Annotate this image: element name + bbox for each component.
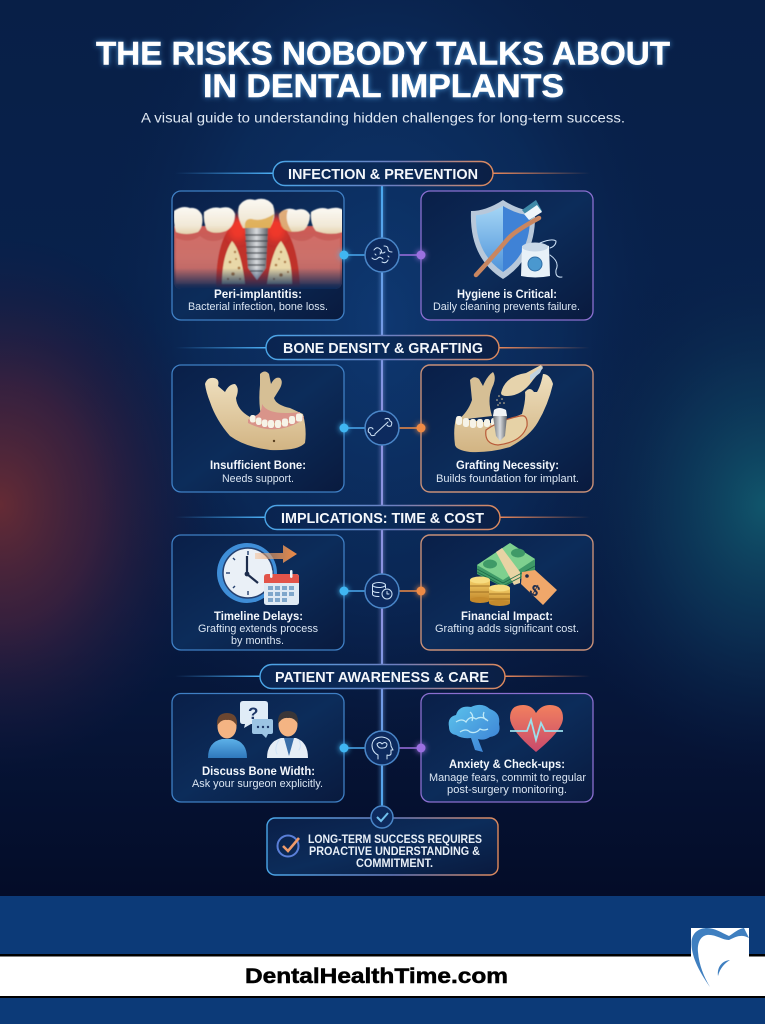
icon: heart with pulse — [510, 705, 563, 752]
card description: Needs support. — [222, 473, 294, 485]
card description: Builds foundation for implant. — [436, 473, 579, 485]
connector node: head — [340, 731, 426, 765]
panel: hygiene is critical — [421, 191, 593, 320]
heading pill: infection and prevention: INFECTION & PREVENTION — [288, 166, 478, 183]
card description — [429, 772, 586, 796]
card title: Financial Impact: — [461, 609, 553, 623]
illustration: jawbone — [205, 372, 306, 450]
connector node: bone — [340, 411, 426, 445]
icon: clock arrow and calendar — [217, 543, 299, 605]
title: IN DENTAL IMPLANTS — [203, 68, 564, 104]
icon: brain — [449, 705, 500, 752]
section rule left — [175, 172, 273, 174]
icon: patient and doctor conversation: ? — [248, 704, 258, 723]
connector node: check — [371, 806, 393, 828]
footer band — [0, 896, 765, 1024]
conclusion text: COMMITMENT. — [356, 856, 433, 870]
section rule left — [175, 347, 267, 348]
icon: shield with toothbrush and floss — [471, 200, 562, 279]
section rule right — [505, 676, 590, 677]
card title: Discuss Bone Width: — [202, 764, 315, 778]
icon: patient and doctor conversation — [208, 701, 308, 758]
subtitle: A visual guide to understanding hidden challenges for long-term success. — [141, 110, 625, 126]
section: bone density and grafting — [172, 336, 593, 492]
card description: Bacterial infection, bone loss. — [188, 301, 328, 313]
card title: Grafting Necessity: — [456, 458, 559, 472]
icon: check circle — [278, 836, 299, 856]
card description: by months. — [231, 635, 284, 647]
central timeline spine — [381, 185, 383, 820]
card description: Grafting extends process — [198, 623, 318, 635]
heading pill: bone density and grafting — [266, 336, 499, 360]
panel: anxiety and check-ups — [421, 694, 593, 802]
illustration: jawbone with graft and implant — [454, 365, 553, 452]
card title: Insufficient Bone: — [210, 458, 306, 472]
panel: conclusion — [267, 818, 498, 875]
card title: Hygiene is Critical: — [457, 287, 557, 301]
section: patient awareness and care — [172, 664, 593, 802]
card description: post-surgery monitoring. — [447, 784, 567, 796]
panel: peri-implantitis — [172, 191, 344, 320]
heading pill: bone density and grafting: BONE DENSITY & GRAFTING — [283, 340, 483, 357]
heading pill: implications: IMPLICATIONS: TIME & COST — [281, 510, 484, 527]
section rule left — [175, 516, 265, 518]
panel: insufficient bone — [172, 365, 344, 492]
icon: cash coins and price tag — [470, 543, 557, 606]
section rule right — [493, 172, 590, 174]
section rule right — [500, 516, 590, 518]
heading pill: patient awareness — [260, 664, 505, 688]
logo: tooth — [691, 928, 749, 987]
panel: grafting necessity — [421, 365, 593, 492]
section: infection and prevention — [172, 162, 593, 320]
conclusion text: LONG-TERM SUCCESS REQUIRES — [308, 832, 482, 846]
heading pill: infection and prevention — [273, 162, 493, 186]
illustration: inflamed gum with implant — [174, 199, 343, 289]
card title: Timeline Delays: — [214, 609, 303, 623]
card description: Ask your surgeon explicitly. — [192, 778, 323, 790]
conclusion text — [308, 832, 482, 870]
card title: Anxiety & Check-ups: — [449, 757, 565, 771]
connector node: time and cost — [340, 574, 426, 608]
panel: financial impact — [421, 535, 593, 650]
title — [96, 36, 670, 104]
connector node: bacteria — [340, 238, 426, 272]
section: implications time and cost — [172, 506, 593, 650]
card description: Manage fears, commit to regular — [429, 772, 586, 784]
section rule left — [175, 676, 260, 677]
panel: timeline delays — [172, 535, 344, 650]
card description: Daily cleaning prevents failure. — [433, 301, 580, 313]
heading pill: patient awareness: PATIENT AWARENESS & CARE — [275, 669, 489, 686]
heading pill: implications — [265, 506, 500, 530]
card title: Peri-implantitis: — [214, 287, 302, 301]
icon: cash coins and price tag: $ — [526, 582, 543, 601]
panel: discuss bone width — [172, 694, 344, 802]
title: THE RISKS NOBODY TALKS ABOUT — [96, 36, 670, 72]
footer website text: DentalHealthTime.com — [245, 965, 508, 988]
conclusion text: PROACTIVE UNDERSTANDING & — [309, 844, 480, 858]
section rule right — [499, 347, 590, 348]
card description: Grafting adds significant cost. — [435, 623, 579, 635]
card description — [198, 623, 318, 647]
